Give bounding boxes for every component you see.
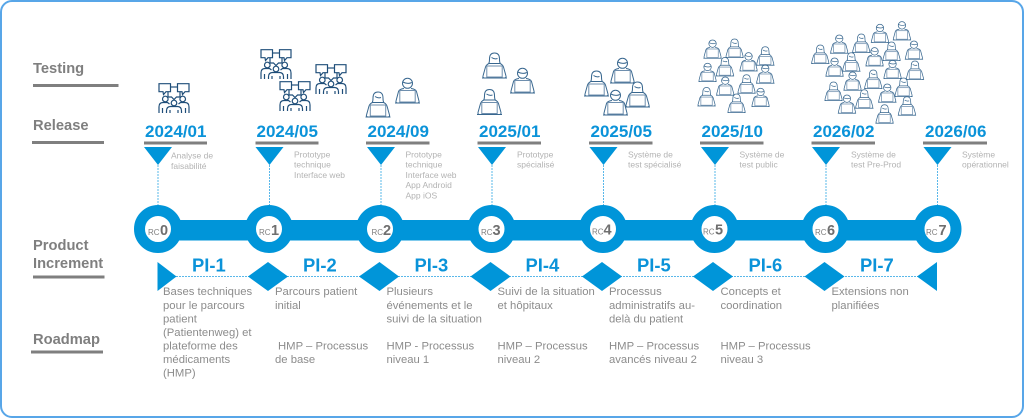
PI-4 column: et hôpitaux <box>498 300 553 312</box>
node RC1: RC <box>259 228 271 237</box>
marker: PI-1/PI-2 diamond <box>248 262 288 291</box>
PI-7 column: PI-7 <box>860 254 894 276</box>
PI-4 column: niveau 2 <box>498 354 540 366</box>
release 2026/02: test Pre-Prod <box>851 160 901 170</box>
release 2026/06: 2026/06 <box>925 122 986 141</box>
PI-6 column: coordination <box>720 300 782 312</box>
node RC6 <box>807 210 844 248</box>
PI-6 column: PI-6 <box>748 254 782 276</box>
node RC7: RC <box>926 228 938 237</box>
release 2025/10 <box>700 122 785 206</box>
label: Release <box>32 118 104 144</box>
release 2025/05: 2025/05 <box>590 122 652 141</box>
label: Release: Release <box>33 118 89 134</box>
label: Product Increment: Increment <box>33 256 103 272</box>
release 2024/09: technique <box>406 160 443 170</box>
node RC0 <box>140 210 176 248</box>
node RC2: 2 <box>383 223 391 239</box>
icons: testers 2025/01 <box>477 53 535 114</box>
release 2024/05 <box>256 122 345 206</box>
release 2025/01 <box>478 122 555 206</box>
node RC4 <box>584 210 622 248</box>
icon: group 2024/01 <box>159 84 189 113</box>
release 2024/09: Prototype <box>406 150 442 160</box>
release 2024/05: Interface web <box>294 170 345 180</box>
release 2025/05 <box>589 122 682 206</box>
node RC5: RC <box>703 228 715 236</box>
PI-3 column: événements et le <box>386 300 473 312</box>
release 2024/01 <box>144 122 213 206</box>
PI-5 column: Processus <box>609 286 662 298</box>
marker: PI-5/PI-6 diamond <box>693 262 733 291</box>
release 2026/02 <box>812 122 901 206</box>
node RC5: 5 <box>715 222 723 238</box>
node RC0: 0 <box>160 223 168 239</box>
release 2024/09: App iOS <box>406 190 437 200</box>
marker: start triangle <box>158 262 176 291</box>
release 2024/09: App Android <box>406 180 452 190</box>
node RC6: RC <box>815 228 827 237</box>
label: Product Increment <box>33 238 104 278</box>
icons: groups 2024/05 <box>261 50 346 111</box>
release 2024/09: Interface web <box>406 170 457 180</box>
release markers <box>144 122 1009 206</box>
icons: testers 2025/05 <box>584 58 650 115</box>
node RC2 <box>362 210 398 248</box>
icons: testers 2024/09 <box>366 78 420 117</box>
PI-2 column: de base <box>275 354 315 366</box>
PI-5 column: avancés niveau 2 <box>609 354 697 366</box>
PI-2 column: PI-2 <box>303 254 337 276</box>
release 2025/05: Système de <box>628 150 673 160</box>
PI-4 column: HMP – Processus <box>498 340 588 352</box>
PI-5 column: PI-5 <box>637 254 671 276</box>
PI-5 column: delà du patient <box>609 314 684 326</box>
release 2024/01: Analyse de <box>171 150 213 160</box>
marker: PI-2/PI-3 diamond <box>359 262 399 291</box>
marker: PI-4/PI-5 diamond <box>582 262 622 291</box>
PI-3 column <box>386 254 482 366</box>
PI-4 column <box>498 254 595 366</box>
node RC4: RC <box>592 228 604 236</box>
PI-3 column: Plusieurs <box>386 286 433 298</box>
product increment axis <box>158 262 937 291</box>
label: Roadmap <box>31 332 103 354</box>
PI-2 column: initial <box>275 300 301 312</box>
release 2026/06: opérationnel <box>962 160 1009 170</box>
release 2024/05: 2024/05 <box>256 122 318 141</box>
release 2025/10: 2025/10 <box>702 122 763 141</box>
node RC7 <box>919 210 956 248</box>
release 2024/09: 2024/09 <box>368 122 429 141</box>
label: Product Increment: Product <box>33 238 89 254</box>
PI-3 column: PI-3 <box>414 254 448 276</box>
PI-6 column: Concepts et <box>720 286 782 298</box>
PI-6 column: niveau 3 <box>720 354 763 366</box>
PI-4 column: Suivi de la situation <box>498 286 595 298</box>
release 2025/05: test spécialisé <box>628 160 682 170</box>
label: Testing: Testing <box>33 61 84 77</box>
icons: testers 2026/02 <box>811 22 924 123</box>
PI-2 column: HMP – Processus <box>278 340 369 352</box>
PI-1 column: (Patientenweg) et <box>163 327 252 339</box>
release 2024/05: technique <box>294 160 331 170</box>
node RC3 <box>473 210 510 248</box>
PI-6 column: HMP – Processus <box>720 340 811 352</box>
PI-1 column: plateforme des <box>163 340 238 352</box>
release 2026/02: Système de <box>851 150 896 160</box>
node RC3: RC <box>481 228 493 237</box>
marker: end triangle <box>917 262 937 291</box>
node RC0: RC <box>148 228 160 237</box>
marker: PI-6/PI-7 diamond <box>804 262 844 291</box>
PI-1 column: Bases techniques <box>163 286 253 298</box>
PI-5 column <box>609 254 700 366</box>
testers icons <box>159 22 924 123</box>
PI-3 column: HMP - Processus <box>386 340 475 352</box>
release 2026/02: 2026/02 <box>813 122 874 141</box>
release 2024/01: faisabilité <box>171 161 207 171</box>
node RC1: 1 <box>271 223 279 239</box>
PI-4 column: PI-4 <box>526 254 560 276</box>
PI-2 column <box>275 254 369 366</box>
PI-7 column <box>832 254 909 312</box>
release 2025/01: spécialisé <box>517 160 555 170</box>
node RC5 <box>696 210 733 248</box>
node RC3: 3 <box>492 223 501 239</box>
release 2024/05: Prototype <box>294 150 331 160</box>
release 2026/06: Système <box>962 150 995 160</box>
timeline bar with release candidates <box>140 210 956 248</box>
PI-1 column: patient <box>163 314 198 326</box>
PI-5 column: HMP – Processus <box>609 340 700 352</box>
PI-1 column: PI-1 <box>192 254 226 276</box>
PI-1 column <box>163 254 253 380</box>
PI-7 column: planifiées <box>832 300 880 312</box>
node RC1 <box>250 210 288 248</box>
row labels <box>31 61 118 354</box>
marker: PI-3/PI-4 diamond <box>470 262 510 291</box>
PI-1 column: médicaments <box>163 354 231 366</box>
PI-6 column <box>720 254 811 366</box>
node RC6: 6 <box>827 223 835 239</box>
PI-7 column: Extensions non <box>832 286 909 298</box>
PI-2 column: Parcours patient <box>275 286 358 298</box>
label: Testing <box>33 61 118 87</box>
node RC4: 4 <box>604 222 612 238</box>
release 2025/10: Système de <box>740 150 785 160</box>
release 2026/06 <box>923 122 1009 206</box>
PI-1 column: pour le parcours <box>163 300 245 312</box>
node RC7: 7 <box>938 223 947 239</box>
PI-1 column: (HMP) <box>163 368 196 380</box>
icons: testers 2025/10 <box>697 39 774 113</box>
PI-3 column: niveau 1 <box>386 354 429 366</box>
PI-3 column: suivi de la situation <box>386 314 482 326</box>
release 2024/01: 2024/01 <box>145 122 206 141</box>
release 2025/01: Prototype <box>517 150 554 160</box>
node RC2: RC <box>372 228 383 237</box>
release 2024/09 <box>366 122 457 206</box>
release 2025/10: test public <box>740 160 779 170</box>
PI-5 column: administratifs au- <box>609 300 695 312</box>
release 2025/01: 2025/01 <box>479 122 540 141</box>
label: Roadmap: Roadmap <box>33 332 100 348</box>
